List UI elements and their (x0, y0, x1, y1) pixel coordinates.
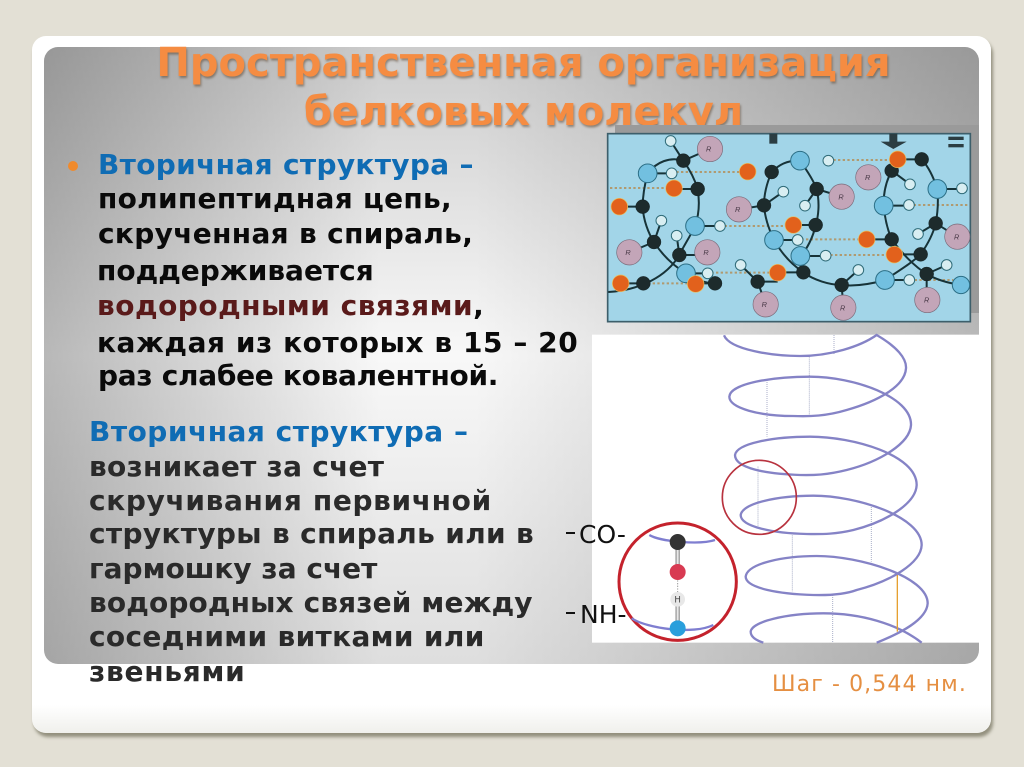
molecular diagram: hydrogen bonds in the polypeptide helix: R (954, 232, 960, 241)
text block: secondary structure definition: скрученная в спираль, (98, 217, 473, 250)
text block: secondary structure definition: раз слабее ковалентной. (98, 359, 498, 392)
text block: how secondary structure forms: гармошку за счет (89, 552, 377, 585)
text block: how secondary structure forms: структуры в спираль или в (89, 517, 534, 550)
helix coil (724, 335, 928, 643)
pitch marker (895, 575, 899, 632)
molecular diagram: hydrogen bonds in the polypeptide helix: R (706, 145, 712, 154)
text block: how secondary structure forms: водородных связей между (89, 586, 533, 619)
molecular diagram: hydrogen bonds in the polypeptide helix: R (625, 248, 631, 257)
text block: secondary structure definition (97, 148, 578, 392)
text block: how secondary structure forms (89, 415, 534, 688)
title: Пространственная организация (156, 40, 891, 86)
molecular diagram: hydrogen bonds in the polypeptide helix: R (924, 296, 930, 305)
text block: how secondary structure forms: возникает за счет (89, 450, 384, 483)
label: -NH-: NH- (580, 600, 627, 629)
bullet (68, 161, 78, 171)
enlarged hydrogen bond view (619, 523, 736, 640)
molecular diagram: hydrogen bonds in the polypeptide helix: R (762, 300, 768, 309)
text block: how secondary structure forms: Вторичная структура – (89, 415, 468, 448)
title: белковых молекул (304, 89, 743, 135)
small red circle (722, 460, 796, 534)
molecule image shadow (615, 125, 979, 313)
text block: secondary structure definition: поддерживается (97, 254, 374, 287)
molecular diagram: hydrogen bonds in the polypeptide helix: R (735, 205, 741, 214)
enlarged hydrogen bond view: H (674, 595, 681, 605)
text block: secondary structure definition: полипептидная цепь, (98, 182, 452, 215)
text block: how secondary structure forms: соседними витками или (89, 620, 485, 653)
molecular diagram: hydrogen bonds in the polypeptide helix (606, 132, 972, 322)
molecular diagram: hydrogen bonds in the polypeptide helix: R (703, 248, 709, 257)
molecular diagram: hydrogen bonds in the polypeptide helix: R (838, 192, 844, 201)
title (156, 40, 891, 135)
panel: gray gradient background (44, 47, 979, 664)
molecular diagram: hydrogen bonds in the polypeptide helix: R (865, 173, 871, 182)
label: -CO-: CO- (579, 520, 626, 549)
caption: helix pitch: Шаг - 0,544 нм. (772, 672, 967, 697)
text block: how secondary structure forms: звеньями (89, 655, 246, 688)
text block: secondary structure definition: водородными связями, (97, 289, 484, 322)
text block: secondary structure definition: каждая из которых в 15 – 20 (97, 326, 578, 359)
molecular diagram: hydrogen bonds in the polypeptide helix: R (840, 303, 846, 312)
helix diagram (592, 334, 979, 644)
text block: secondary structure definition: Вторичная структура – (98, 148, 474, 181)
text block: how secondary structure forms: скручивания первичной (89, 484, 492, 517)
